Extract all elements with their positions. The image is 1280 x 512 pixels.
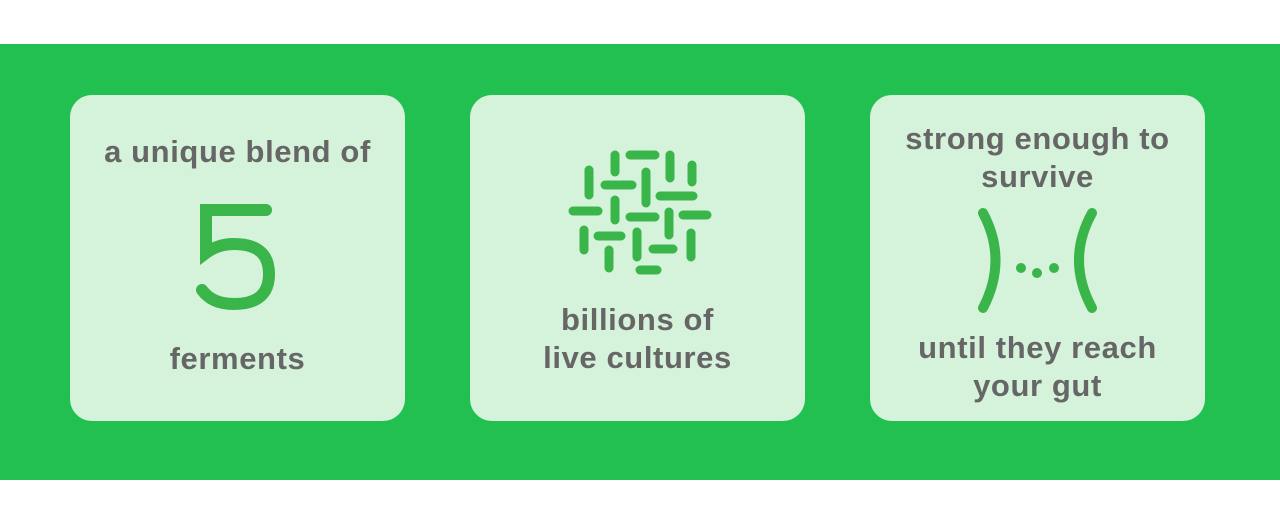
- panel: live cultures: [470, 95, 805, 421]
- panel: survive: [870, 95, 1205, 421]
- icon: bacteria cultures: [573, 155, 707, 270]
- heading: a unique blend of: [104, 134, 371, 169]
- icon: passage: [983, 213, 1092, 308]
- caption: billions of: [561, 302, 714, 337]
- caption: [543, 302, 732, 375]
- heading: survive: [981, 159, 1094, 194]
- icon: number 5: [202, 210, 269, 304]
- caption: until they reach: [918, 330, 1157, 365]
- caption: your gut: [973, 368, 1102, 403]
- caption: ferments: [170, 341, 305, 376]
- panel: five ferments: [70, 95, 405, 421]
- heading: [905, 121, 1170, 194]
- caption: [918, 330, 1157, 403]
- caption: live cultures: [543, 340, 732, 375]
- heading: strong enough to: [905, 121, 1170, 156]
